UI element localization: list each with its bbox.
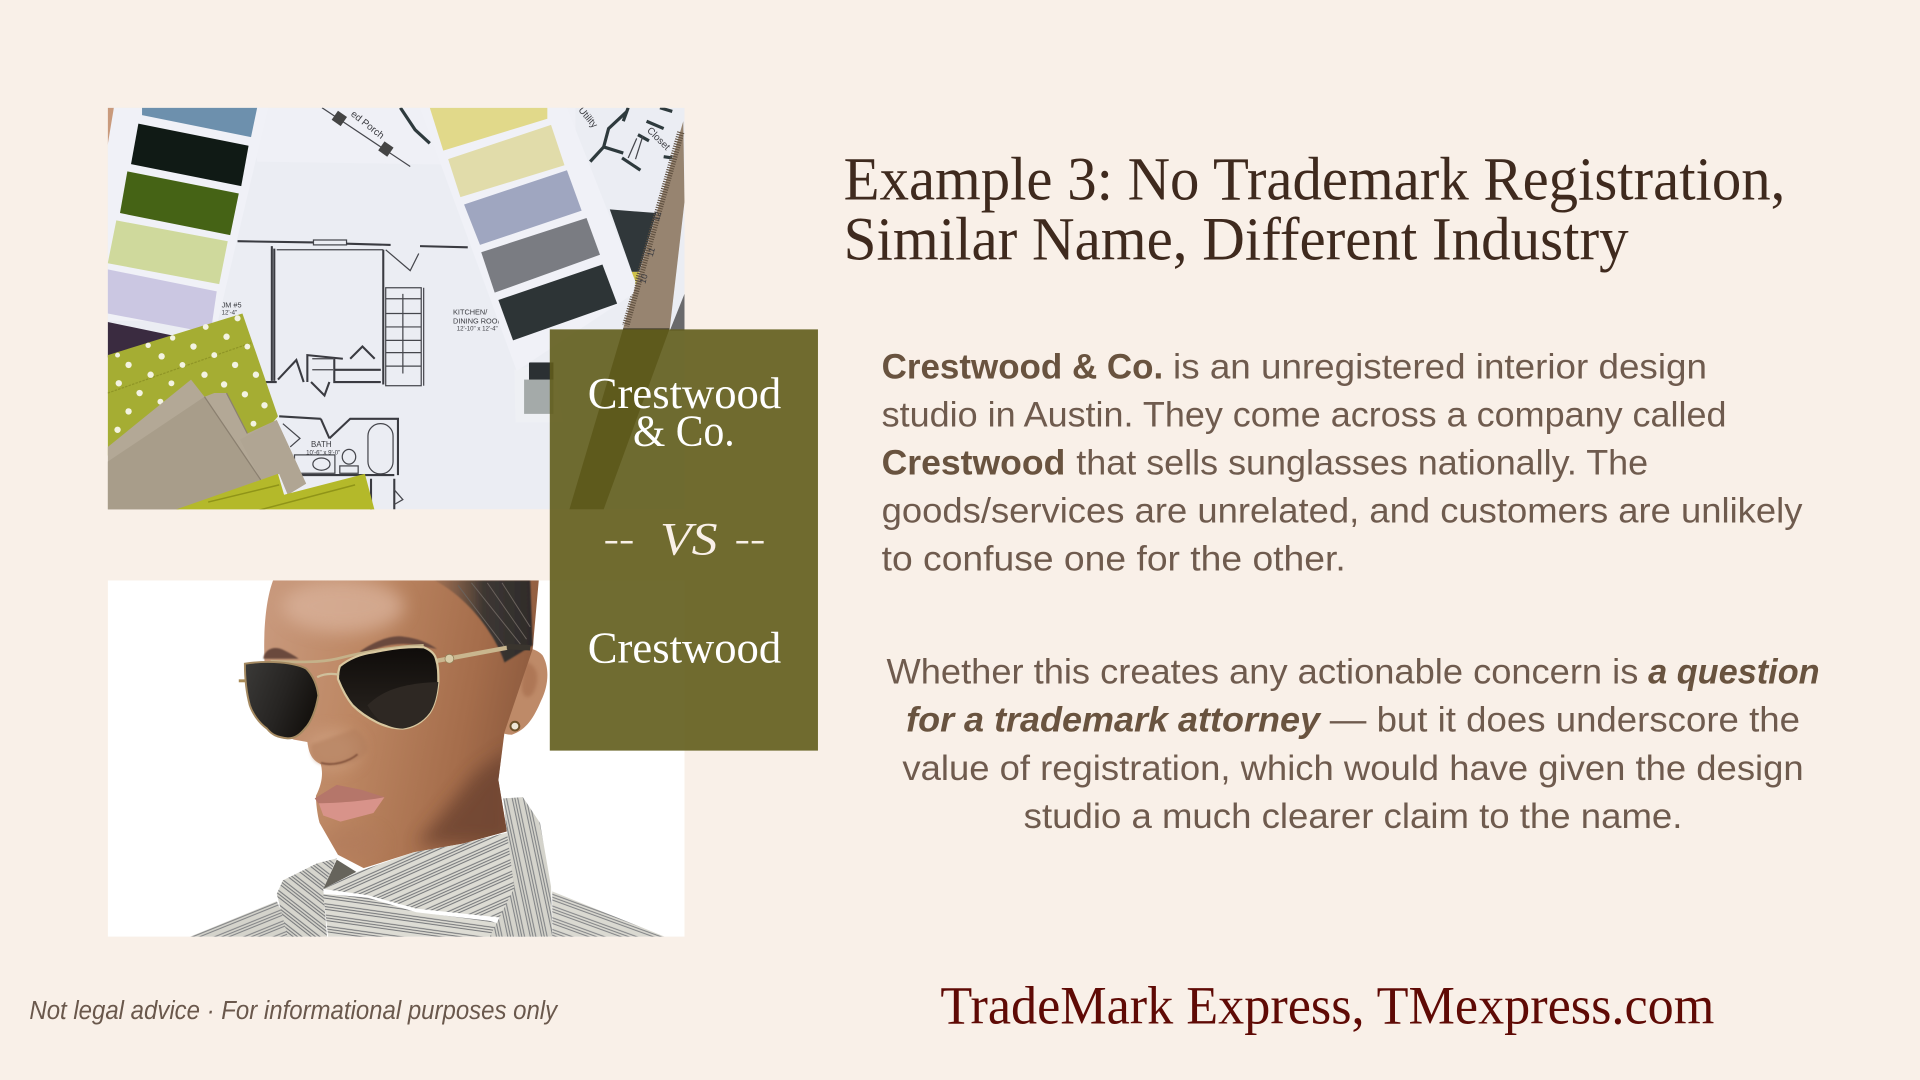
text block: scenario: Crestwood & Co. [882, 346, 1163, 386]
infographic canvas [30, 108, 1818, 1035]
text block: scenario: Crestwood [882, 442, 1065, 482]
text block: analysis: a question [1648, 652, 1820, 692]
blueprint lines: 12'-4" [222, 310, 237, 317]
photo: woman wearing aviator sunglasses [108, 579, 684, 937]
title [844, 146, 1785, 274]
top floor plan sheet [322, 105, 672, 170]
earring [510, 722, 519, 731]
versus label [604, 515, 765, 566]
footer brand: TradeMark Express, TMexpress.com [940, 976, 1714, 1036]
polka dot fabric [108, 313, 278, 456]
panel: name comparison [550, 329, 818, 751]
text block: scenario [882, 346, 1803, 579]
versus label: -- [604, 520, 634, 558]
blueprint lines [222, 240, 504, 509]
top floor plan sheet: ed Porch [348, 109, 386, 142]
ruler: 10 [638, 273, 650, 285]
nose [308, 732, 362, 766]
text block: scenario: is an unregistered interior design [1173, 346, 1707, 386]
blueprint lines: JM #5 [222, 300, 242, 309]
text block: analysis: for a trademark attorney [906, 700, 1322, 740]
blueprint lines: DINING ROOM [453, 316, 504, 325]
blueprint lines: KITCHEN/ [453, 308, 488, 317]
ruler [569, 121, 684, 509]
ear [500, 648, 547, 735]
text block: scenario: to confuse one for the other. [882, 539, 1346, 579]
dark object behind sheets [610, 209, 656, 272]
versus label: -- [735, 520, 765, 558]
photo: interior design floor plan and swatches [108, 105, 684, 511]
blueprint lines: BATH [311, 440, 332, 449]
linen fabric [108, 380, 306, 511]
text block: analysis [887, 652, 1820, 836]
hair [435, 580, 533, 662]
title: Example 3: No Trademark Registration, [844, 146, 1785, 214]
face and neck skin [264, 580, 539, 868]
blueprint lines: 12'-10" x 12'-4" [457, 326, 498, 333]
panel name: Crestwood and Co.: Crestwood [588, 369, 781, 418]
text block: analysis: studio a much clearer claim to the name. [1024, 796, 1682, 836]
ruler: 11 [645, 246, 657, 258]
disclaimer: Not legal advice · For informational purposes only [29, 997, 559, 1025]
small photo card under swatches [514, 361, 563, 422]
lime fabric [173, 474, 375, 511]
blueprint lines: 10'-6" x 9'-0" [306, 449, 340, 456]
lips [315, 785, 384, 822]
sunglasses [239, 645, 530, 738]
top floor plan sheet: Closet [644, 125, 672, 153]
versus label: VS [660, 515, 718, 566]
left swatch card [108, 108, 268, 358]
title: Similar Name, Different Industry [844, 206, 1629, 274]
text block: analysis: value of registration, which would have given the design [902, 748, 1804, 788]
text block: analysis: Whether this creates any actionable concern is [887, 652, 1638, 692]
striped shirt [190, 797, 665, 937]
panel name: Crestwood: Crestwood [588, 623, 781, 672]
text block: scenario: goods/services are unrelated, and customers are unlikely [882, 491, 1803, 531]
ruler: 12 [651, 210, 663, 222]
right swatch card [420, 108, 636, 371]
text block: analysis: — but it does underscore the [1330, 700, 1800, 740]
text block: scenario: that sells sunglasses nationally. The [1076, 442, 1648, 482]
eyebrow [360, 636, 437, 654]
panel name: Crestwood and Co. [588, 369, 781, 456]
top floor plan sheet: Utility [576, 105, 600, 131]
panel name: Crestwood and Co.: & Co. [633, 407, 735, 456]
skin shading [282, 579, 514, 857]
text block: scenario: studio in Austin. They come across a company called [882, 394, 1727, 434]
